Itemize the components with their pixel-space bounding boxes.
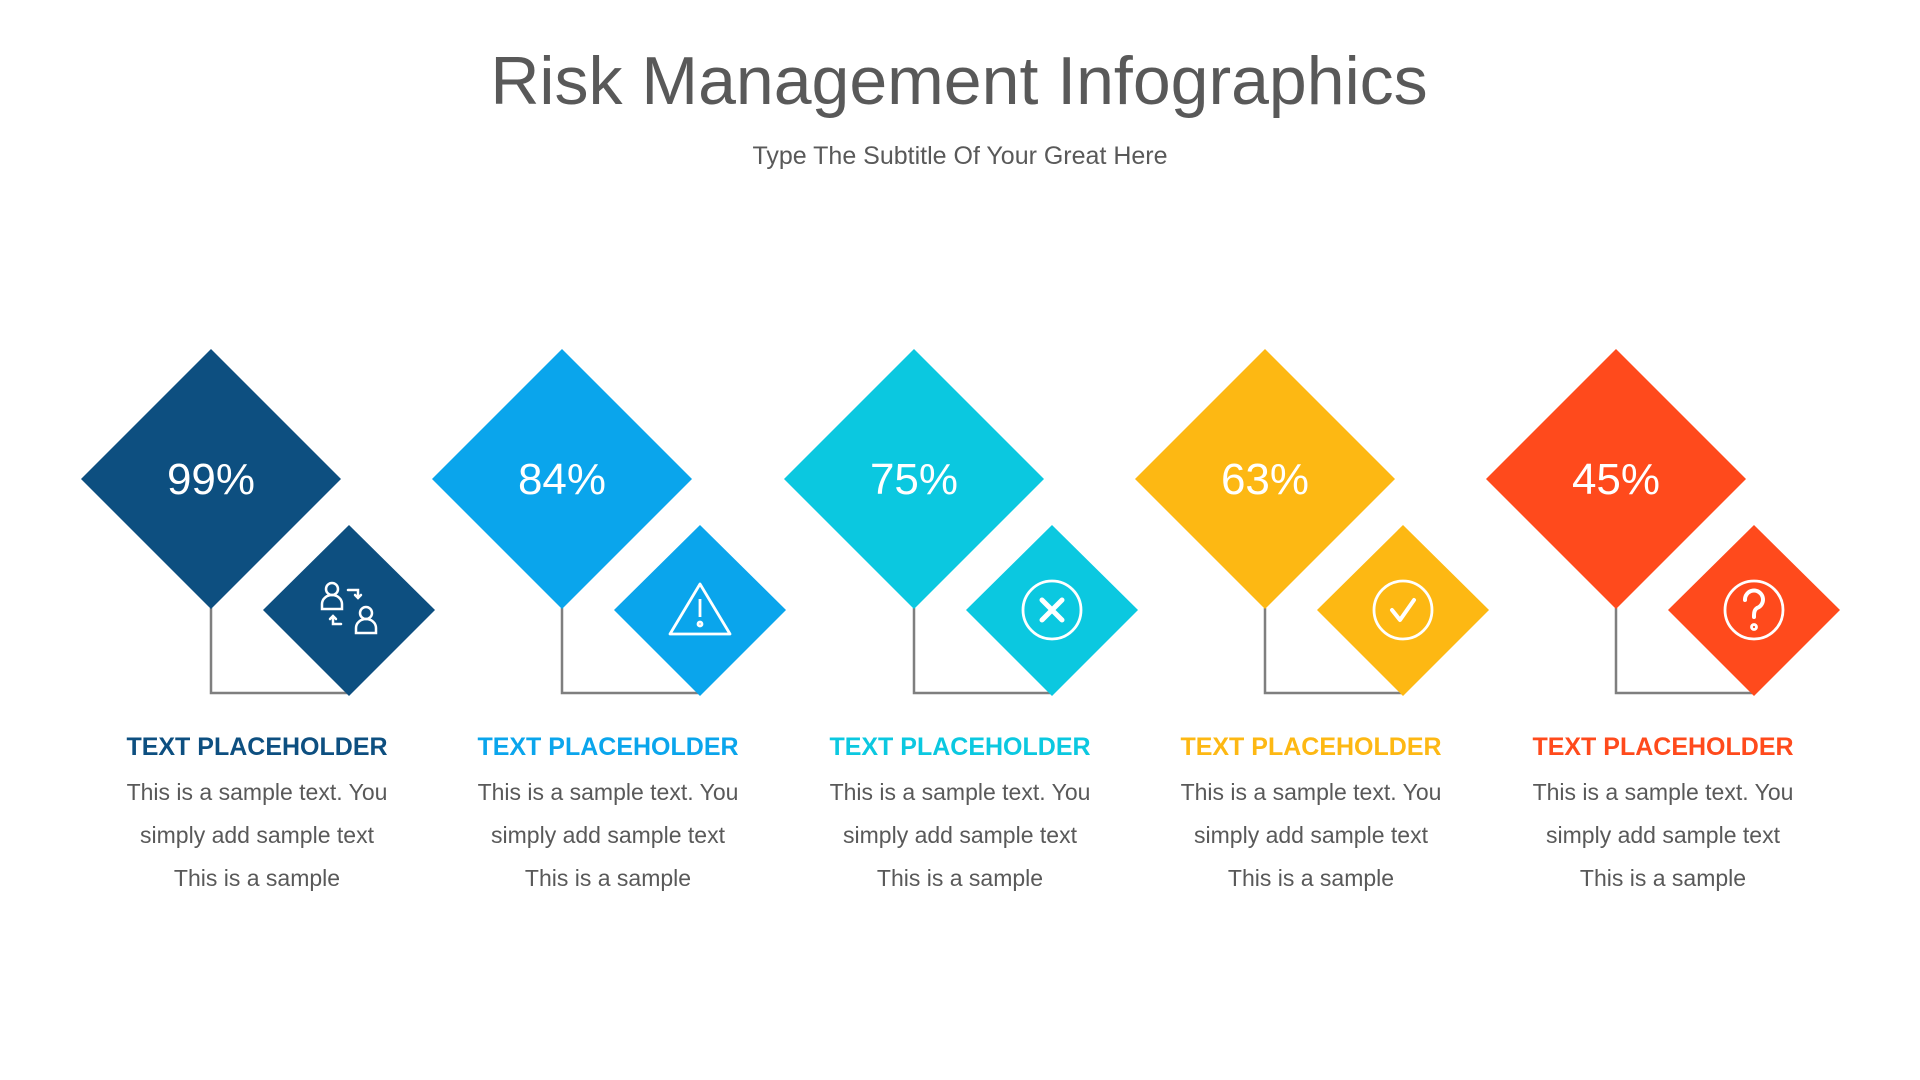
big diamond 1 bbox=[81, 349, 341, 609]
small diamond 2 bbox=[614, 525, 786, 696]
body 3: This is a sample bbox=[877, 865, 1043, 891]
connector 3 bbox=[914, 608, 1052, 693]
body 1: This is a sample bbox=[174, 865, 340, 891]
icon: people exchange bbox=[322, 583, 376, 633]
small diamond 3 bbox=[966, 525, 1138, 696]
icon: question circle bbox=[1725, 581, 1783, 639]
heading 1: TEXT PLACEHOLDER bbox=[126, 733, 388, 761]
percent 4: 63% bbox=[1221, 455, 1309, 504]
body 5: This is a sample bbox=[1580, 865, 1746, 891]
body 1: This is a sample text. You bbox=[127, 779, 387, 805]
body 2: This is a sample text. You bbox=[478, 779, 738, 805]
small diamond 4 bbox=[1317, 525, 1489, 696]
heading 3: TEXT PLACEHOLDER bbox=[829, 733, 1091, 761]
icon: check circle bbox=[1374, 581, 1432, 639]
big diamond 3 bbox=[784, 349, 1044, 609]
body 5: This is a sample text. You bbox=[1533, 779, 1793, 805]
connector 1 bbox=[211, 608, 349, 693]
panel: item 1 bbox=[81, 349, 435, 891]
body 5: simply add sample text bbox=[1546, 822, 1781, 848]
heading 4: TEXT PLACEHOLDER bbox=[1180, 733, 1442, 761]
icon: cross circle bbox=[1023, 581, 1081, 639]
body 2: simply add sample text bbox=[491, 822, 726, 848]
percent 3: 75% bbox=[870, 455, 958, 504]
body 3: This is a sample text. You bbox=[830, 779, 1090, 805]
big diamond 2 bbox=[432, 349, 692, 609]
subtitle: Type The Subtitle Of Your Great Here bbox=[752, 142, 1168, 170]
body 4: simply add sample text bbox=[1194, 822, 1429, 848]
panel: item 3 bbox=[784, 349, 1138, 891]
heading 2: TEXT PLACEHOLDER bbox=[477, 733, 739, 761]
body 4: This is a sample bbox=[1228, 865, 1394, 891]
percent 1: 99% bbox=[167, 455, 255, 504]
title: Risk Management Infographics bbox=[490, 43, 1428, 119]
icon: warning bbox=[670, 584, 730, 634]
panel: item 4 bbox=[1135, 349, 1489, 891]
connector 5 bbox=[1616, 608, 1754, 693]
panel: item 2 bbox=[432, 349, 786, 891]
body 2: This is a sample bbox=[525, 865, 691, 891]
body 1: simply add sample text bbox=[140, 822, 375, 848]
percent 5: 45% bbox=[1572, 455, 1660, 504]
heading 5: TEXT PLACEHOLDER bbox=[1532, 733, 1794, 761]
body 3: simply add sample text bbox=[843, 822, 1078, 848]
big diamond 4 bbox=[1135, 349, 1395, 609]
big diamond 5 bbox=[1486, 349, 1746, 609]
small diamond 5 bbox=[1668, 525, 1840, 696]
connector 2 bbox=[562, 608, 700, 693]
percent 2: 84% bbox=[518, 455, 606, 504]
body 4: This is a sample text. You bbox=[1181, 779, 1441, 805]
panel: item 5 bbox=[1486, 349, 1840, 891]
connector 4 bbox=[1265, 608, 1403, 693]
small diamond 1 bbox=[263, 525, 435, 696]
